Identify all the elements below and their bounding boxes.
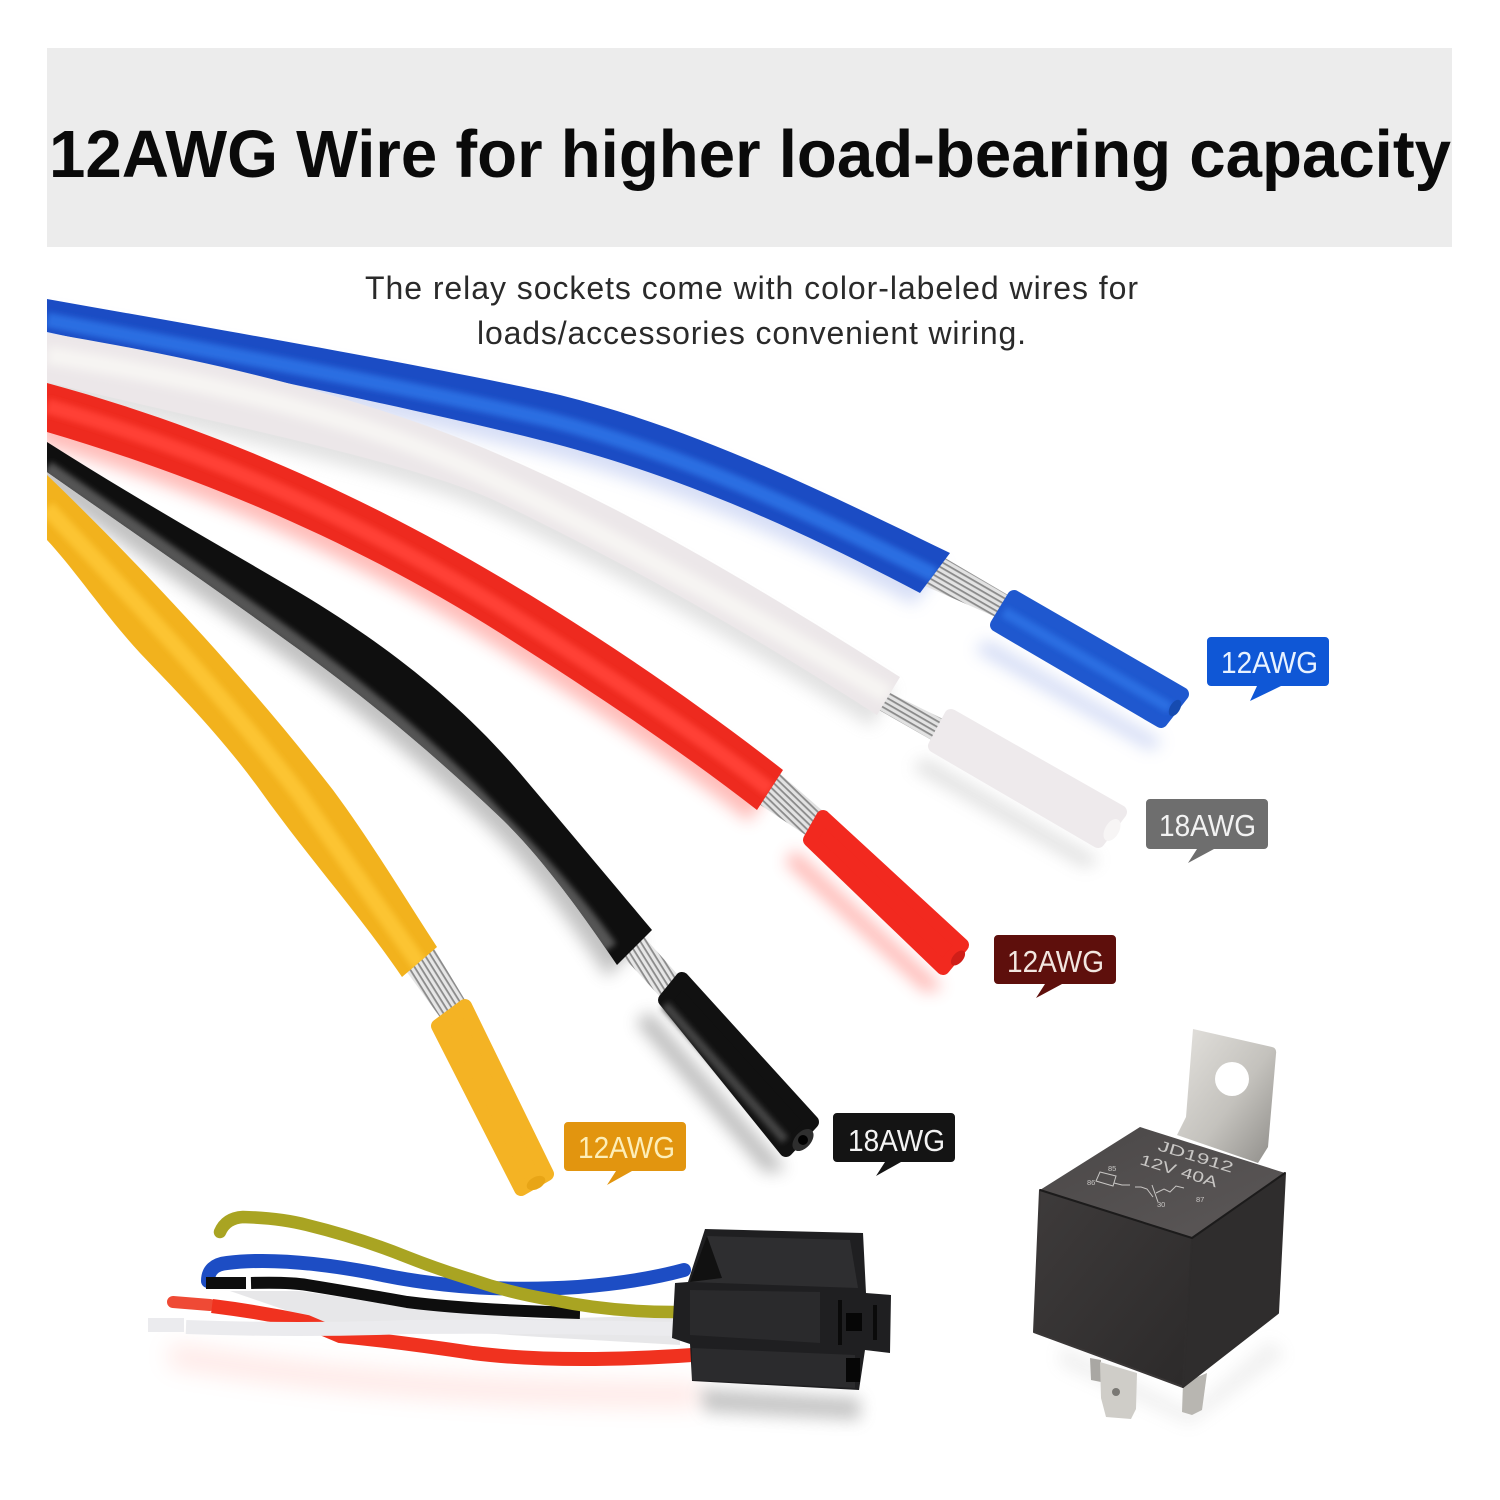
title banner xyxy=(47,48,1452,247)
exposed copper strands xyxy=(756,772,825,836)
exposed copper strands xyxy=(925,558,1008,618)
label: black 18AWG: 18AWG xyxy=(848,1123,945,1158)
subtitle xyxy=(365,270,1138,351)
label: orange 12AWG: 12AWG xyxy=(578,1130,675,1165)
label: dark red 12AWG: 12AWG xyxy=(1007,944,1104,979)
label: blue 12AWG: 12AWG xyxy=(1221,645,1318,680)
relay left face xyxy=(1034,1190,1192,1387)
wire tip xyxy=(438,1006,547,1189)
relay printed text: 12V 40A xyxy=(1138,1152,1219,1191)
gray white lead xyxy=(230,1291,680,1345)
relay printed text: 86 xyxy=(1087,1178,1095,1187)
relay xyxy=(1034,1029,1285,1425)
black lead xyxy=(206,1283,580,1313)
relay printed text: JD1912 xyxy=(1156,1138,1235,1177)
mounting bracket xyxy=(1177,1029,1276,1163)
yellow lead xyxy=(220,1217,674,1312)
relay right face xyxy=(1183,1173,1285,1387)
label: black 18AWG xyxy=(833,1113,955,1176)
red lead xyxy=(173,1302,210,1305)
label: dark red 12AWG xyxy=(994,935,1116,998)
label: blue 12AWG xyxy=(1207,637,1329,701)
blue wire xyxy=(47,299,1184,721)
red wire xyxy=(47,383,968,968)
wire tip xyxy=(810,817,962,968)
relay printed text: 30 xyxy=(1157,1200,1165,1209)
exposed copper strands xyxy=(872,688,945,742)
relay printed text xyxy=(1087,1138,1235,1209)
subtitle: The relay sockets come with color-labeled wires for xyxy=(365,270,1138,306)
label: orange 12AWG xyxy=(564,1122,686,1185)
relay printed text: 87 xyxy=(1196,1195,1204,1204)
relay socket with wires xyxy=(148,1217,891,1420)
black wire xyxy=(47,442,818,1155)
relay printed text: 85 xyxy=(1108,1164,1116,1173)
wire tip xyxy=(935,716,1120,841)
wire tip xyxy=(997,597,1182,721)
exposed copper strands xyxy=(404,945,468,1020)
exposed copper strands xyxy=(618,929,678,1000)
socket body xyxy=(672,1229,891,1390)
label: gray 18AWG xyxy=(1146,799,1268,863)
yellow wire xyxy=(47,475,548,1193)
blue lead xyxy=(208,1261,684,1289)
white wire xyxy=(47,333,1124,844)
wire shadows xyxy=(37,311,1163,1172)
wire tip xyxy=(665,979,812,1150)
subtitle: loads/accessories convenient wiring. xyxy=(477,315,1026,351)
label: gray 18AWG: 18AWG xyxy=(1159,808,1256,843)
white lead xyxy=(148,1325,675,1329)
relay top face xyxy=(1040,1127,1285,1238)
title: 12AWG Wire for higher load-bearing capacity xyxy=(49,117,1451,192)
blade pins xyxy=(1090,1358,1101,1382)
